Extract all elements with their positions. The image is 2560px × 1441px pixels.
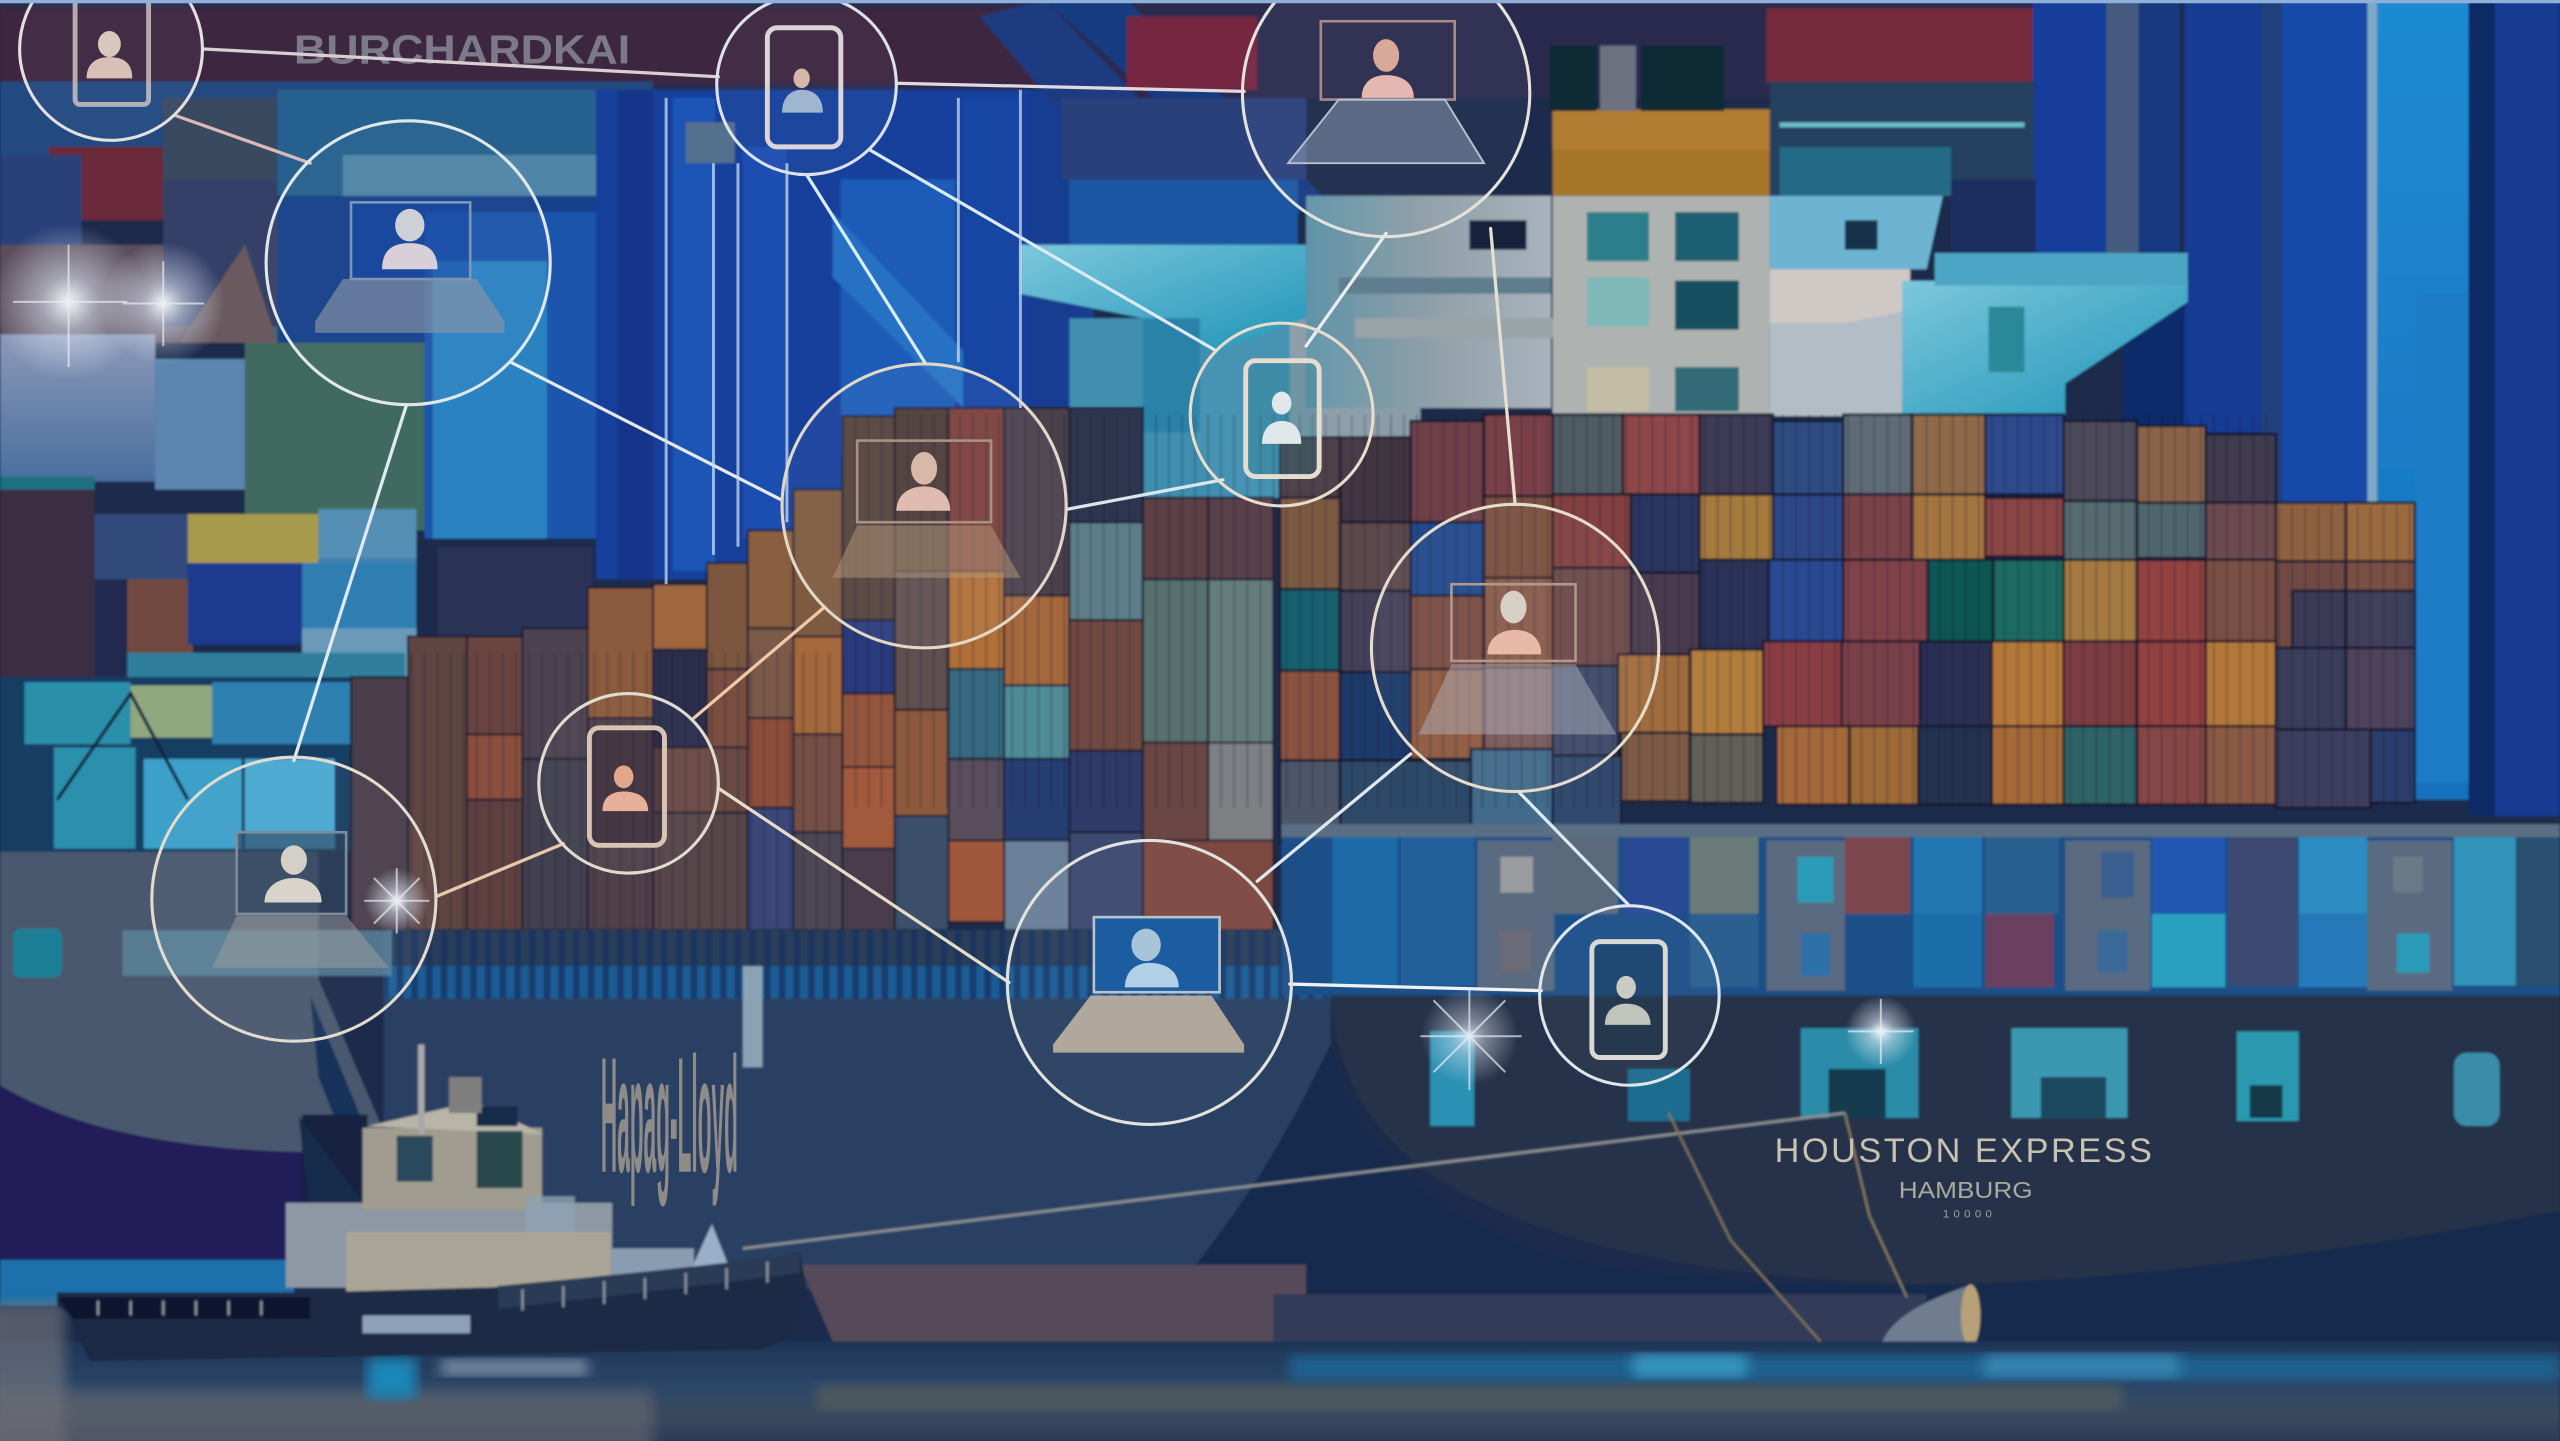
tow line and mooring ropes bbox=[743, 1113, 1907, 1341]
node: laptop lower left bbox=[152, 757, 436, 1041]
container door texture bbox=[408, 415, 2416, 930]
node: phone top centre bbox=[717, 0, 896, 175]
text: BURCHARDKAI crane lettering: BURCHARDKAI bbox=[294, 27, 630, 73]
deck rail with blue lights bbox=[384, 930, 1331, 1067]
text: HOUSTON EXPRESS ship name: HOUSTON EXPRESS bbox=[1775, 1132, 2155, 1170]
rudder bbox=[1882, 1284, 1980, 1346]
ship bridge superstructure bbox=[1020, 8, 2188, 498]
node: phone bottom right bbox=[1540, 906, 1719, 1085]
node: laptop upper left bbox=[266, 121, 550, 405]
lens flares bbox=[0, 224, 1917, 1090]
node: laptop right bbox=[1371, 504, 1659, 791]
node: phone lower left bbox=[539, 694, 718, 873]
quay crane upper left bbox=[0, 0, 2033, 539]
lashing pillars bbox=[1478, 840, 2452, 991]
text: registration number: 10000 bbox=[1943, 1208, 1992, 1220]
node: phone top left bbox=[20, 0, 202, 140]
stern hull bbox=[1331, 995, 2560, 1284]
bridge windows bbox=[1587, 212, 1739, 411]
node: laptop lower centre bbox=[1007, 840, 1291, 1124]
text: Hapag-Lloyd hull lettering: Hapag-Lloyd bbox=[601, 1025, 738, 1207]
stern lashing bridge and lit containers bbox=[1282, 824, 2560, 995]
left container stack bbox=[351, 408, 1273, 930]
teal lit containers at bow bbox=[0, 677, 367, 852]
network connection lines bbox=[176, 49, 1629, 991]
left shore stacks bbox=[0, 477, 593, 681]
crane beams, blue verticals bbox=[596, 0, 1322, 579]
text: HAMBURG home port: HAMBURG bbox=[1899, 1177, 2033, 1203]
thin crane verticals bbox=[666, 90, 1020, 584]
water bbox=[0, 1260, 2560, 1441]
top edge highlight bbox=[0, 0, 2560, 3]
main container stack bbox=[1280, 415, 2415, 842]
mid hull bow section bbox=[384, 992, 1331, 1289]
bow hull bbox=[0, 852, 392, 1260]
node: laptop top right bbox=[1242, 0, 1530, 237]
dark lower hull shadow bbox=[800, 1044, 2560, 1346]
node: phone centre right bbox=[1190, 323, 1373, 506]
tugboat bbox=[57, 1044, 807, 1361]
stern lit windows bbox=[1430, 1028, 2500, 1126]
node: laptop centre bbox=[782, 364, 1066, 648]
crane legs right bbox=[2033, 0, 2560, 816]
